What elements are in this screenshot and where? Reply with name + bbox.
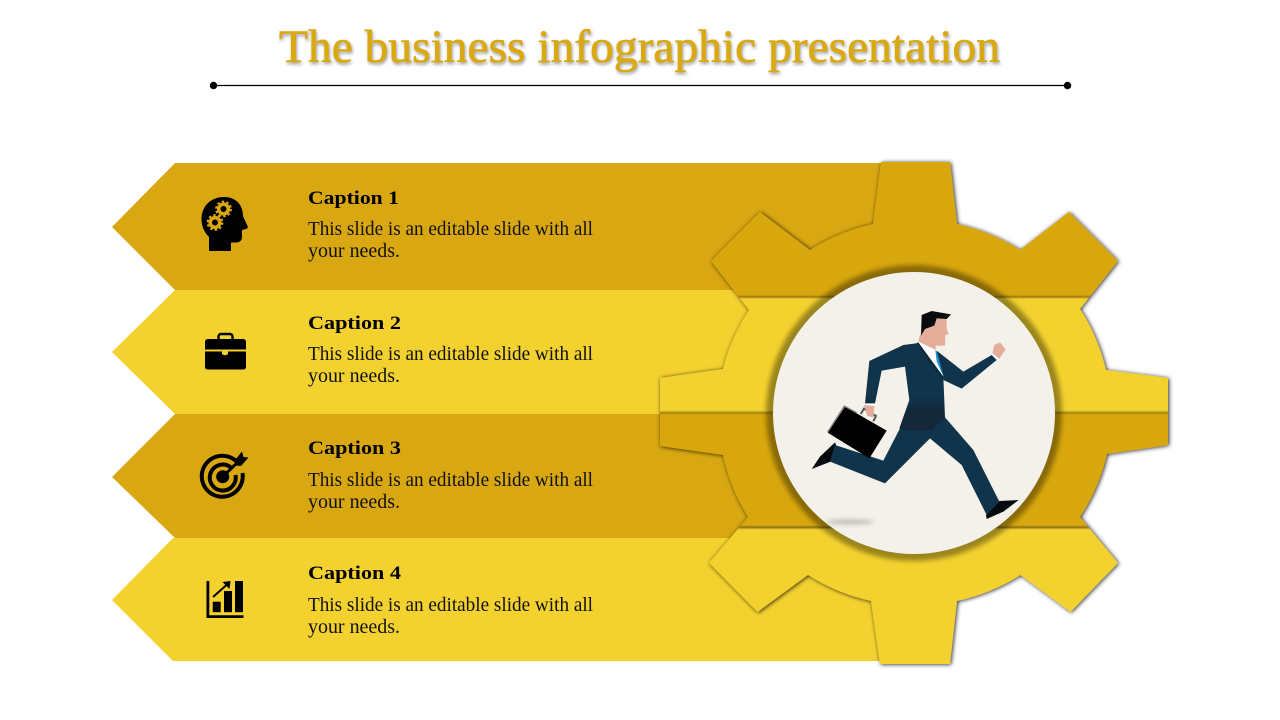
caption 2 text [308, 313, 593, 387]
hair [921, 311, 951, 336]
icon: briefcase [205, 334, 246, 370]
arrow band 3 [112, 414, 900, 538]
caption 2 text: Caption 2 [308, 313, 401, 334]
photo circle shadow [766, 265, 1062, 561]
jacket [865, 343, 945, 431]
rear hand [864, 405, 875, 417]
icon: bar chart with arrow [206, 581, 244, 618]
arrow band 2 [112, 290, 900, 414]
title divider with end dots [210, 82, 1071, 89]
arrow band 1 [112, 163, 900, 290]
briefcase edge highlight [828, 406, 857, 432]
caption 1 text: your needs. [308, 240, 400, 262]
rear cuff [865, 402, 875, 406]
caption 2 text: your needs. [308, 365, 400, 387]
briefcase handle [861, 409, 876, 421]
caption 4 text [308, 563, 593, 638]
icon: head with gears [202, 197, 248, 251]
fist [993, 342, 1006, 359]
photo circle [773, 272, 1055, 554]
briefcase [828, 407, 887, 458]
caption 3 text: Caption 3 [308, 438, 401, 459]
caption 4 text: Caption 4 [308, 563, 402, 584]
front shoe [986, 500, 1019, 519]
caption 4 text: This slide is an editable slide with all [308, 594, 593, 616]
caption 3 text: This slide is an editable slide with all [308, 469, 593, 491]
caption 4 text: your needs. [308, 616, 400, 638]
front arm [937, 351, 997, 389]
caption 1 text: Caption 1 [308, 188, 399, 209]
ground shadow [826, 520, 874, 524]
caption 3 text [308, 438, 593, 513]
arrow band 4 [112, 538, 900, 661]
neck and face [918, 318, 949, 357]
back shoe [812, 442, 837, 469]
lapel [916, 342, 943, 380]
title: The business infographic presentation [279, 21, 1000, 73]
running businessman [812, 311, 1019, 524]
shirt [918, 342, 943, 376]
caption 1 text [308, 188, 593, 262]
caption 2 text: This slide is an editable slide with all [308, 343, 593, 365]
tie [935, 350, 943, 376]
caption 1 text: This slide is an editable slide with all [308, 218, 593, 240]
icon: target with arrow [202, 452, 248, 497]
front cuff [991, 353, 998, 361]
legs [830, 417, 999, 515]
caption 3 text: your needs. [308, 491, 400, 513]
gear [650, 150, 1180, 678]
